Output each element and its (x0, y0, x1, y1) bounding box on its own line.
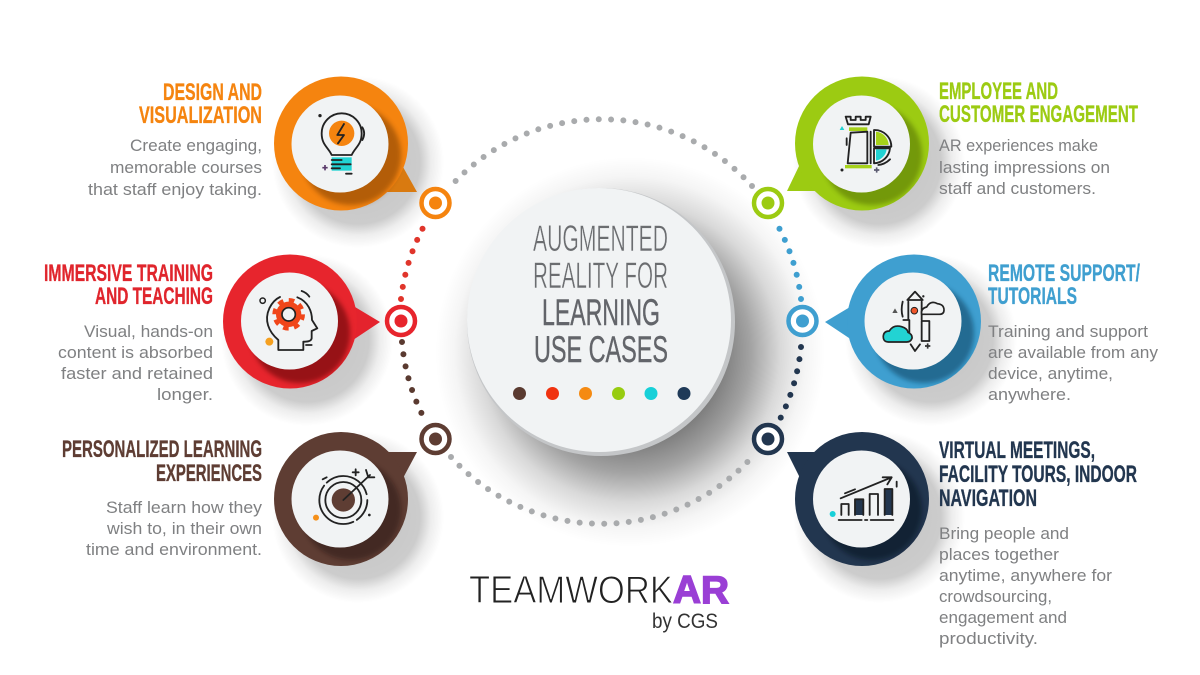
icon: rising bar chart (830, 477, 897, 520)
heading: EMPLOYEE AND (939, 78, 1058, 105)
icon: rocket and clouds (883, 292, 944, 351)
target marker blue (788, 307, 816, 335)
description: longer. (157, 385, 213, 404)
description: staff and customers. (939, 179, 1096, 198)
description: AR experiences make (939, 136, 1098, 155)
description: Bring people and (939, 524, 1069, 543)
panel: immersive training and teaching (44, 254, 415, 404)
target marker navy (754, 425, 782, 453)
heading (62, 436, 262, 487)
heading (139, 79, 262, 129)
description: engagement and (939, 608, 1067, 627)
panel: virtual meetings (754, 425, 1137, 648)
orange bubble (274, 76, 417, 210)
description: content is absorbed (58, 343, 213, 362)
description: time and environment. (86, 540, 262, 559)
description: faster and retained (61, 364, 213, 383)
target marker green (754, 189, 782, 217)
heading (939, 437, 1137, 512)
description: wish to, in their own (106, 519, 262, 538)
description: device, anytime, (988, 364, 1113, 383)
logo: TeamworkAR by CGS (469, 569, 729, 633)
panel: design and visualization (88, 76, 450, 217)
green bubble (787, 76, 929, 210)
description: Create engaging, (130, 136, 262, 155)
icon: target with arrow (313, 469, 374, 524)
icon: light bulb (318, 113, 364, 174)
description: places together (939, 545, 1059, 564)
heading: TUTORIALS (988, 283, 1077, 310)
target marker brown (422, 425, 450, 453)
description: that staff enjoy taking. (88, 180, 262, 199)
soft background shadow (221, 76, 1017, 603)
description (939, 524, 1112, 648)
target marker red (387, 307, 415, 335)
description: lasting impressions on (939, 158, 1110, 177)
heading: NAVIGATION (939, 485, 1037, 512)
heading: IMMERSIVE TRAINING (44, 260, 213, 287)
panel: personalized learning experiences (62, 425, 450, 566)
infographic canvas (44, 76, 1158, 648)
description: anywhere. (988, 385, 1071, 404)
description (58, 322, 213, 404)
dotted ring (401, 119, 801, 524)
central title: REALITY FOR (533, 255, 668, 296)
heading (988, 260, 1140, 310)
description (86, 498, 263, 559)
central title (533, 218, 668, 370)
brown bubble (274, 432, 417, 566)
description: memorable courses (110, 158, 262, 177)
heading: DESIGN AND (163, 79, 262, 106)
icon: chess rook and pie chart (840, 117, 891, 173)
description (88, 136, 262, 199)
logo: TeamworkAR by CGS: AR (673, 569, 729, 612)
description: Visual, hands-on (84, 322, 213, 341)
logo: TeamworkAR by CGS: TEAMWORK (469, 569, 673, 612)
heading: AND TEACHING (95, 283, 213, 310)
description: anytime, anywhere for (939, 566, 1112, 585)
target marker orange (422, 189, 450, 217)
central disc (467, 188, 735, 456)
description: crowdsourcing, (939, 587, 1052, 606)
panel: employee and customer engagement (754, 76, 1138, 217)
logo: TeamworkAR by CGS: by CGS (652, 610, 718, 633)
heading (44, 260, 213, 310)
heading (939, 78, 1138, 128)
blue bubble (825, 254, 981, 388)
panel: remote support tutorials (788, 254, 1158, 404)
central title: USE CASES (534, 329, 668, 370)
description: Staff learn how they (106, 498, 263, 517)
navy bubble (787, 432, 929, 566)
central title: LEARNING (542, 292, 660, 333)
heading: EXPERIENCES (156, 460, 262, 487)
red bubble (223, 254, 380, 388)
description: Training and support (988, 322, 1148, 341)
description: productivity. (939, 629, 1038, 648)
description: are available from any (988, 343, 1158, 362)
description (939, 136, 1110, 198)
description (988, 322, 1158, 404)
heading: VISUALIZATION (139, 102, 262, 129)
icon: head with gear (260, 291, 317, 350)
central title: AUGMENTED (533, 218, 668, 259)
colour key dots (513, 387, 690, 400)
heading: PERSONALIZED LEARNING (62, 436, 262, 463)
heading: VIRTUAL MEETINGS, (939, 437, 1095, 464)
